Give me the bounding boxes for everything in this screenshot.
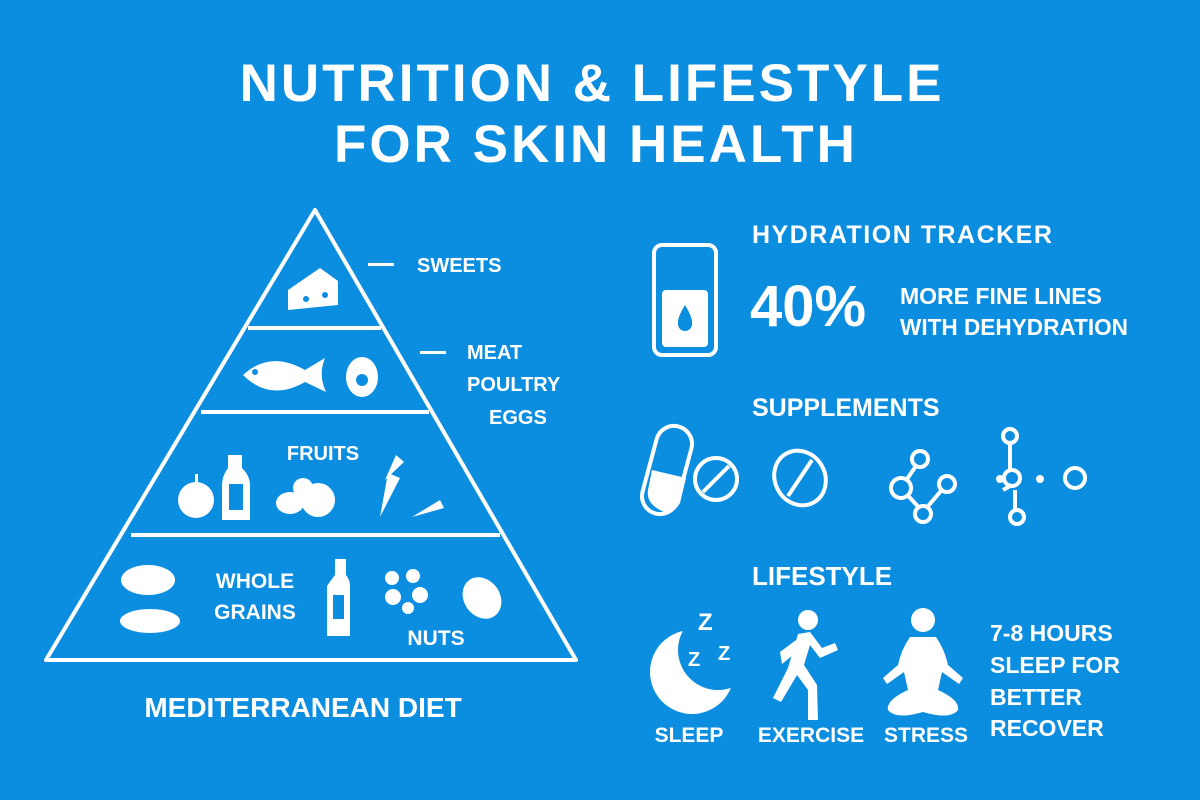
title xyxy=(240,54,944,174)
icon: leaf xyxy=(455,570,509,626)
icon: bread xyxy=(120,565,180,633)
label: nuts: NUTS xyxy=(407,627,465,650)
panel: lifestyle xyxy=(650,561,1120,747)
label: whole grains: GRAINS xyxy=(214,601,296,624)
icon: molecule 2 xyxy=(998,429,1085,524)
panel: mediterranean pyramid xyxy=(46,210,576,660)
label: meat poultry eggs xyxy=(420,342,561,429)
panel: supplements xyxy=(638,394,1085,524)
icon: apple xyxy=(178,474,214,518)
title: NUTRITION & LIFESTYLE xyxy=(240,54,944,113)
labels: lifestyle items: STRESS xyxy=(884,724,968,747)
icon: pill oval xyxy=(764,441,836,515)
label: whole grains xyxy=(214,570,296,624)
icon: runner xyxy=(773,610,838,720)
labels: lifestyle items xyxy=(655,724,968,747)
icon: capsule xyxy=(638,422,696,518)
text: sleep recommendation xyxy=(990,620,1120,741)
text: sleep recommendation: 7-8 HOURS xyxy=(990,620,1113,646)
icon: fish xyxy=(243,358,326,392)
text: more fine lines: WITH DEHYDRATION xyxy=(900,314,1128,340)
stat: 40%: 40% xyxy=(750,274,866,339)
text: sleep recommendation: SLEEP FOR xyxy=(990,652,1120,678)
labels: lifestyle items: EXERCISE xyxy=(758,724,864,747)
label: whole grains: WHOLE xyxy=(216,570,294,593)
icon: cheese xyxy=(288,268,338,310)
text: more fine lines xyxy=(900,283,1128,340)
heading: lifestyle: LIFESTYLE xyxy=(752,561,892,591)
label: meat poultry eggs: POULTRY xyxy=(467,374,561,396)
icon: glass xyxy=(654,245,716,355)
heading: hydration tracker: HYDRATION TRACKER xyxy=(752,221,1053,249)
label: sweets xyxy=(368,255,501,277)
text: sleep recommendation: RECOVER xyxy=(990,715,1104,741)
icon: moon and zzz: Z xyxy=(718,643,730,665)
title: FOR SKIN HEALTH xyxy=(334,115,858,174)
icon: moon and zzz: Z xyxy=(698,609,713,636)
icon: egg xyxy=(346,357,378,397)
panel: hydration tracker xyxy=(654,221,1128,355)
label: fruits: FRUITS xyxy=(287,443,359,465)
icon: bottle xyxy=(222,455,250,520)
icon: meditation xyxy=(883,608,963,716)
label: meat poultry eggs: EGGS xyxy=(489,407,547,429)
icon: carrots xyxy=(380,455,444,517)
heading: supplements: SUPPLEMENTS xyxy=(752,394,940,422)
icon: oil bottle xyxy=(327,559,350,636)
labels: lifestyle items: SLEEP xyxy=(655,724,723,747)
icon: moon and zzz: Z xyxy=(688,649,700,671)
icon: moon and zzz xyxy=(650,609,758,714)
icon: pill round xyxy=(695,458,737,500)
icon: fruits xyxy=(276,478,335,517)
label: sweets: SWEETS xyxy=(417,255,501,277)
pyramid outline xyxy=(46,210,576,660)
text: sleep recommendation: BETTER xyxy=(990,684,1082,710)
text: more fine lines: MORE FINE LINES xyxy=(900,283,1102,309)
icon: nuts xyxy=(385,569,428,614)
icon: molecule xyxy=(891,451,955,522)
label: meat poultry eggs: MEAT xyxy=(467,342,522,364)
caption: mediterranean diet: MEDITERRANEAN DIET xyxy=(144,692,462,723)
